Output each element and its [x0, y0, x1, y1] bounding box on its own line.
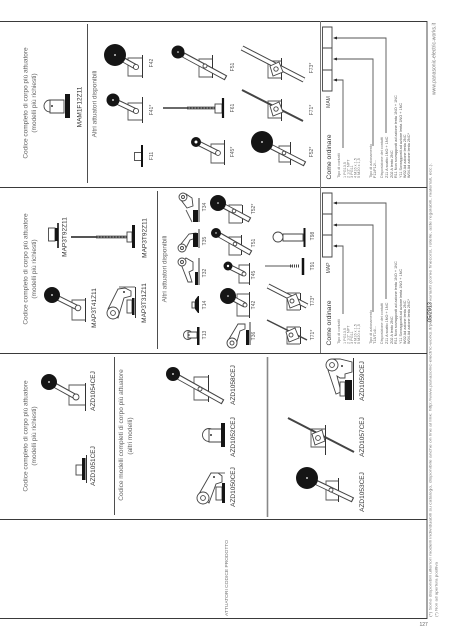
panel: MAP actuators: [22, 193, 316, 348]
arrows: [333, 202, 386, 314]
order legend text: 4 M16 x 1,5: [354, 158, 358, 178]
labels: AZD1054CEJ AZD1051CEJ: AZD1054CEJ: [90, 371, 97, 411]
label: MAP3T41Z11: MAP3T41Z11: [91, 288, 98, 328]
labels: AZD row two: AZD1052CEJ: [230, 417, 237, 457]
icon: MAP3T92Z11 small: [48, 223, 58, 248]
order code boxes: [322, 27, 332, 91]
heading: MAM complete code: Codice completo di corpo più attuatore: [22, 47, 30, 159]
labels: T row one: T14: [202, 300, 208, 309]
icon: AZD1053CEJ: [296, 467, 353, 502]
labels: AZD row three: AZD1053CEJ: [359, 472, 366, 512]
label: MAM1F12Z11: MAM1F12Z11: [76, 86, 84, 127]
labels: F11 F41 F42: F42: [149, 58, 155, 67]
icon: F71: [242, 90, 303, 121]
icon: T35: [178, 229, 199, 252]
order legend text: 5 M20 x 1,5: [357, 158, 361, 178]
order legend text: Y11 Sovrapposti ad azione lenta 1NO + 1NC: [399, 103, 403, 178]
label: MAM: MAM: [326, 96, 332, 108]
footnotes: (*) Sono disponibili ulteriori modelli individuabili su catalogo, disponibile anche on line al link: http://www.panasonic-electric-works.it/pew/it/ Per varianti (come finecorsi, rotelle, aste regolabili, materiali, ecc.).: [428, 163, 432, 617]
labels: T row two: [251, 204, 257, 340]
labels: T row three: T71*: [310, 330, 316, 340]
heading: MAP complete code: (modelli più richiesti): [31, 239, 38, 299]
heading: MAM complete code: [22, 47, 38, 159]
heading: MAP complete code: [22, 213, 38, 325]
labels: T row three: T73*: [310, 296, 316, 306]
icon: AZD1058CEJ: [166, 367, 223, 402]
order legend text: 2 1/2" NPT: [346, 325, 350, 344]
icon: T34: [179, 193, 199, 222]
order legend text: 2 1/2" NPT: [346, 159, 350, 178]
heading: AZD complete code: (modelli più richiesti): [31, 406, 38, 466]
order legend text: Tipo di azionamento: [369, 144, 373, 178]
order legend text: 4 M16 x 1,5: [354, 324, 358, 344]
order legend text: 1 PG13,5: [343, 328, 347, 344]
icon: F45: [191, 137, 224, 165]
website: www.panasonic-electric-works.it: [432, 22, 438, 95]
order legend text: 3 PG11: [350, 165, 354, 178]
heading: AZD complete code: Codice completo di corpo più attuatore: [22, 380, 30, 492]
order legend text: W02 Ad azione lenta 2NC: [403, 300, 407, 344]
heading: AZD other models: (altri modelli): [127, 417, 134, 455]
labels: T row two: T45: [251, 270, 257, 279]
order legend text: Z11 A scatto 1NO + 1NC: [385, 302, 389, 344]
icon: F41: [106, 94, 142, 123]
labels: F51 F61 F45: F51: [230, 62, 236, 71]
labels: F11 F41 F42: F41*: [149, 105, 155, 115]
order legend text: Z02 A lento 2NC: [390, 316, 394, 344]
labels: AZD row three: AZD1057CEJ: [359, 417, 366, 457]
labels: AZD row three: AZD1059CEJ: [359, 361, 366, 401]
order legend text: R11 Non sovrapposti ad azione lenta 1NO + 1NC: [394, 95, 398, 178]
order legend text: Disposizione dei contatti: [380, 137, 384, 178]
arrows: [333, 36, 386, 148]
labels: AZD row three: [359, 361, 366, 512]
icon: MAM1F12Z11 roller actuator: [44, 94, 70, 118]
label: MAP3T92Z11 rod: MAP3T92Z11: [142, 218, 148, 258]
icon: AZD1054CEJ: [41, 374, 86, 411]
footnotes: (*) Non ad apertura positiva: [434, 561, 438, 617]
icon: T98: [273, 228, 304, 247]
labels: T row one: T35: [202, 236, 208, 245]
heading: MAM other actuators: Altri attuatori disponibili: [92, 71, 98, 137]
labels: T row three: T91: [310, 261, 316, 270]
order legend text: Tipo di contatti: [337, 319, 341, 344]
heading: come ordinare MAM: Come ordinare: [326, 134, 333, 179]
labels: F73 F71 F52: F71*: [309, 105, 315, 115]
order legend text: Tipo di contatti: [337, 153, 341, 178]
labels: F51 F61 F45: [230, 62, 236, 157]
labels: F73 F71 F52: [309, 63, 315, 157]
labels: AZD1054CEJ AZD1051CEJ: AZD1051CEJ: [90, 446, 97, 486]
order legend text: [337, 261, 411, 344]
labels: T row two: T51: [251, 238, 257, 247]
labels: T row two: T36: [251, 331, 257, 340]
panel: MAM actuators: [22, 44, 315, 167]
labels: AZD1054CEJ AZD1051CEJ: [90, 371, 97, 486]
order code boxes: [322, 193, 332, 257]
side title: ATTUATORI CODICE PRODOTTO: [224, 540, 229, 616]
labels: F73 F71 F52: F73*: [309, 63, 315, 73]
icon: AZD1052CEJ: [202, 423, 225, 447]
icon: T91: [265, 258, 303, 275]
labels: T row one: T32: [202, 268, 208, 277]
labels: T row one: [202, 202, 208, 339]
icon: AZD1050CEJ: [197, 473, 225, 504]
heading: AZD complete code: [22, 380, 38, 492]
order legend text: Y11 Sovrapposti ad azione lenta 1NO + 1NC: [399, 269, 403, 344]
page number: 127: [420, 622, 428, 628]
labels: T row two: T42: [251, 300, 257, 309]
label: MAP3T31Z11: MAP3T31Z11: [141, 283, 148, 323]
panel: come ordinare MAP: [322, 193, 411, 346]
date mark: 05/2013: [428, 302, 434, 322]
order legend text: Disposizione dei contatti: [380, 303, 384, 344]
icon: MAP3T92Z11 rod: [71, 225, 135, 248]
icon: T51: [211, 228, 251, 255]
order legend text: 1 PG13,5: [343, 162, 347, 178]
order legend text: Z11 A scatto 1NO + 1NC: [385, 136, 389, 178]
labels: F73 F71 F52: F52*: [309, 147, 315, 157]
footnotes: [428, 163, 438, 617]
order legend text: W04 Ad azione lenta 2NC*: [407, 299, 411, 344]
order legend text: Tipo di azionamento: [369, 310, 373, 344]
heading: come ordinare MAP: Come ordinare: [326, 300, 333, 345]
order legend text: F11/F12/...: [373, 160, 377, 178]
icon: AZD1051CEJ: [76, 455, 86, 483]
icon: F52: [251, 131, 305, 165]
icon: T71: [267, 320, 307, 344]
heading: MAP other actuators: Altri attuatori disponibili: [162, 236, 168, 302]
icon: T73: [268, 286, 307, 310]
labels: AZD row two: AZD1050CEJ: [230, 467, 237, 507]
panel: AZD actuators: [22, 358, 366, 512]
labels: T row three: [310, 231, 316, 340]
label: MAP3T92Z11 small: MAP3T92Z11: [62, 217, 68, 257]
label: MAP: MAP: [326, 262, 332, 273]
heading: AZD other models: Codice modelli completi di corpo più attuatore: [118, 369, 125, 501]
order legend text: W02 Ad azione lenta 2NC: [403, 134, 407, 178]
heading: MAP complete code: Codice completo di corpo più attuatore: [22, 213, 30, 325]
icon: T14: [192, 296, 199, 313]
icon: AZD1059CEJ: [326, 358, 354, 400]
icon: T32: [178, 258, 199, 285]
panel: come ordinare MAM: [322, 27, 411, 180]
labels: F51 F61 F45: F61: [230, 103, 236, 112]
labels: AZD row two: AZD1058CEJ: [230, 365, 237, 405]
order legend text: 5 M20 x 1,5: [357, 324, 361, 344]
heading: AZD other models: [118, 369, 134, 501]
icon: T42: [220, 288, 250, 318]
icon: F73: [242, 48, 304, 80]
order legend text: W04 Ad azione lenta 2NC*: [407, 133, 411, 178]
icon: MAP3T31Z11: [107, 287, 136, 319]
labels: F51 F61 F45: F45*: [230, 147, 236, 157]
icon: T45: [224, 262, 250, 285]
icon: MAP3T41Z11: [44, 287, 86, 322]
order legend text: T13/T14/...: [373, 326, 377, 344]
icon: T13: [184, 327, 200, 345]
labels: T row one: T13: [202, 330, 208, 339]
labels: T row one: T34: [202, 202, 208, 211]
icon: F42: [104, 44, 142, 78]
labels: F11 F41 F42: [149, 58, 155, 160]
labels: T row three: T98: [310, 231, 316, 240]
icon: AZD1057CEJ: [288, 418, 354, 455]
labels: AZD row two: [230, 365, 237, 507]
order legend text: 3 PG11: [350, 331, 354, 344]
icon: F51: [172, 46, 226, 78]
icon: T36: [227, 322, 250, 348]
order legend text: [337, 95, 411, 178]
icon: T52: [210, 195, 250, 223]
icon: F61: [163, 98, 223, 118]
icon: F11: [134, 145, 142, 167]
labels: T row two: T52*: [251, 204, 257, 214]
labels: F11 F41 F42: F11: [149, 152, 155, 160]
order legend text: R11 Non sovrapposti ad azione lenta 1NO + 1NC: [394, 261, 398, 344]
heading: MAM complete code: (modelli più richiesti): [31, 73, 38, 133]
order legend text: Z02 A lento 2NC: [390, 150, 394, 178]
